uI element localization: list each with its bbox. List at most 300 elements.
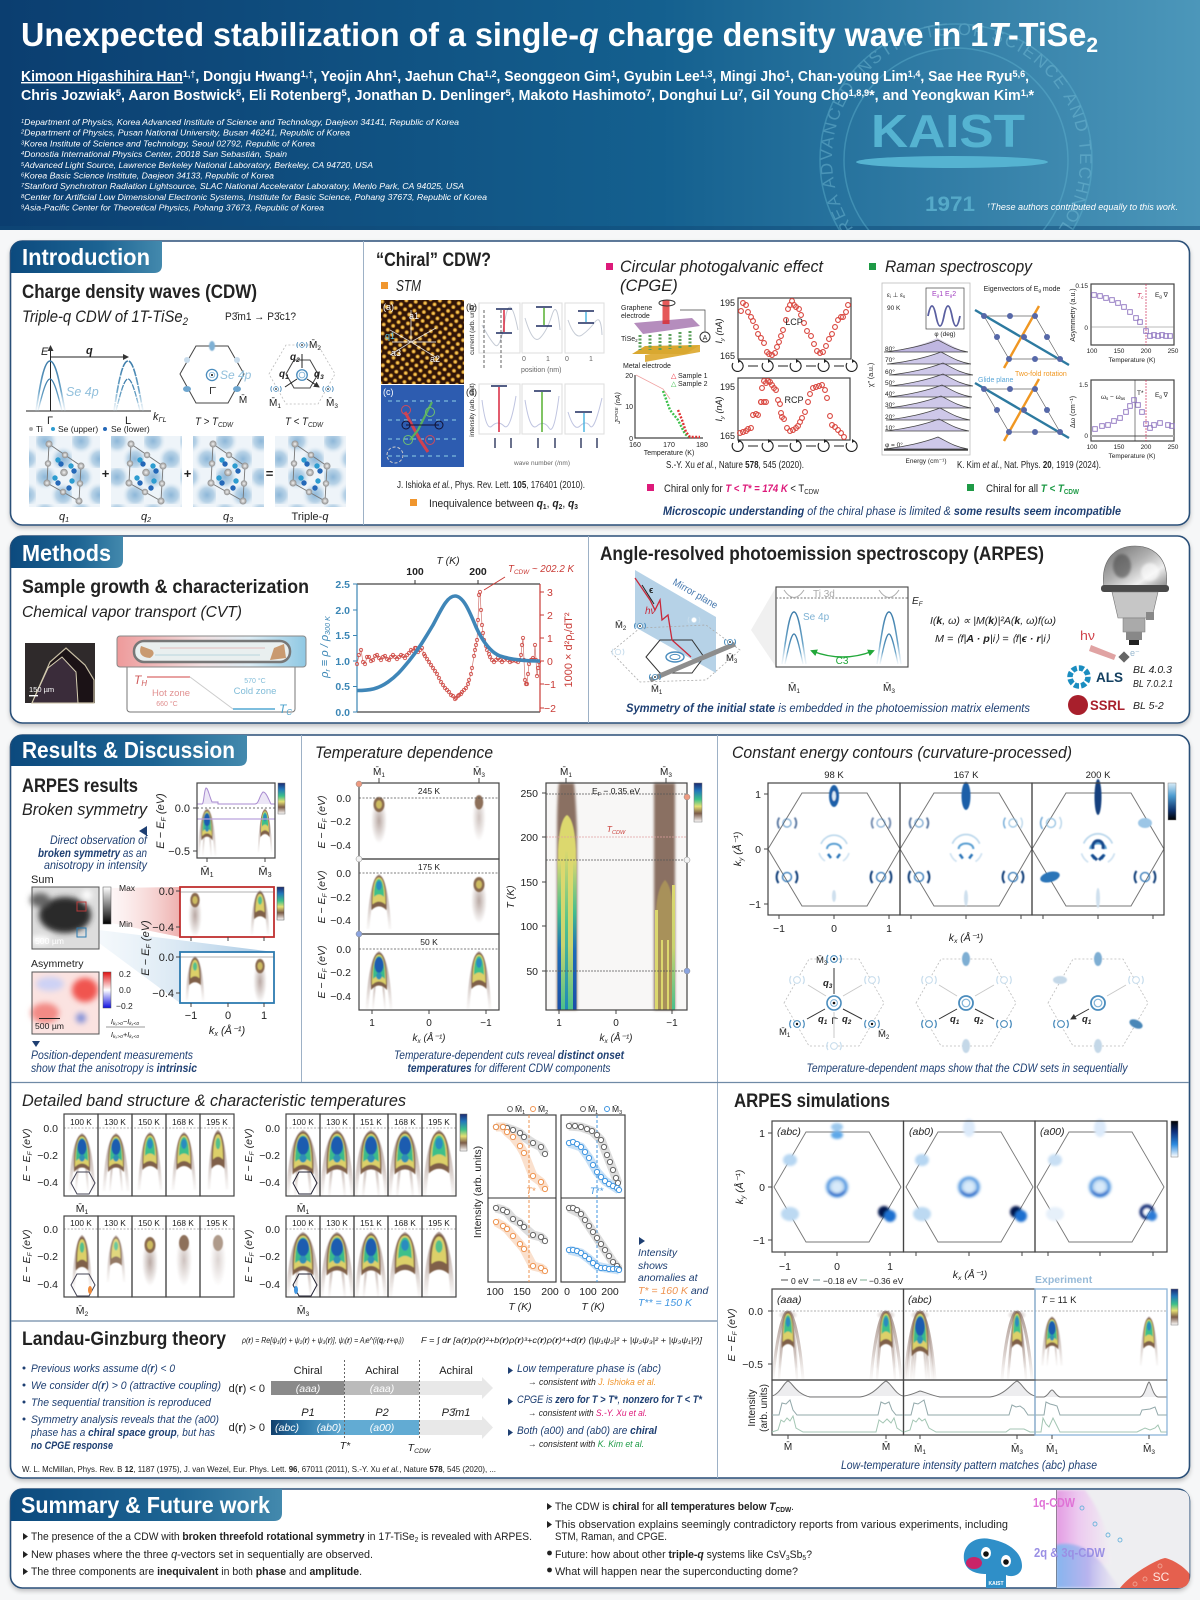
- CVT tube diagram: Hot zone: [152, 688, 190, 699]
- broken symmetry band plot: −0.5: [168, 846, 190, 858]
- phase diagram: SC: [1153, 1570, 1170, 1584]
- q-vector schematics: q2: [842, 1014, 852, 1026]
- temperature stack plot: EF − 0.35 eV: [592, 786, 640, 798]
- intrinsic note: [31, 1041, 198, 1075]
- simulated band plots and intensity curves: M̄3: [1143, 1442, 1155, 1456]
- phase diagram: [1056, 1490, 1190, 1588]
- intensity versus temperature plots: T (K): [508, 1301, 532, 1313]
- affiliations: 1Department of Physics, Korea Advanced Institute of Science and Technology, Daejeon 34141, Republic of Korea: [21, 117, 459, 127]
- position band plots: 1: [261, 1010, 267, 1022]
- band diagram: Γ: [47, 415, 53, 427]
- simulated constant energy maps: kx (Å⁻¹): [953, 1268, 987, 1282]
- heading: chiral CDW: “Chiral” CDW?: [376, 250, 491, 271]
- crystal photo: 150 µm: [29, 685, 54, 694]
- Raman eigenvector diagrams: Eigenvectors of Eg mode: [984, 286, 1061, 293]
- CVT tube diagram: 570 °C: [244, 677, 266, 685]
- simulated constant energy maps: (a00): [1040, 1126, 1065, 1138]
- real-space sum map: Max: [119, 883, 136, 893]
- constant energy maps: 98 K: [824, 770, 844, 781]
- STM images a and c: (a): [383, 302, 394, 312]
- CVT tube diagram: 660 °C: [156, 700, 178, 708]
- affiliations: 5Advanced Light Source, Lawrence Berkeley National Laboratory, Berkeley, CA 94720, USA: [21, 160, 373, 170]
- heading: constant energy contours: Constant energy contours (curvature-processed): [732, 744, 1072, 762]
- affiliations: 7Stanford Synchrotron Radiation Lightsource, SLAC National Accelerator Laboratory, Menlo Park, CA 94025, USA: [21, 181, 464, 191]
- temperature band cuts: −0.4: [330, 915, 351, 927]
- intensity versus temperature plots: 150: [513, 1286, 531, 1298]
- intensity versus temperature plots: 100: [579, 1286, 597, 1298]
- q-vector schematics: q2: [974, 1014, 984, 1026]
- resistivity chart: 2.5: [335, 579, 350, 591]
- broken symmetry band plot: [155, 783, 285, 879]
- BZ below TCDW: M̄3: [326, 396, 338, 410]
- detailed band plots: M1 and M2: 168 K: [172, 1218, 194, 1228]
- BZ below TCDW: q3: [314, 369, 324, 381]
- constant energy maps: 1: [886, 923, 892, 935]
- real-space sum map: Sum: [31, 874, 54, 886]
- STM images a and c: a3: [391, 348, 401, 358]
- Landau formulas: F = ∫ d r [a(r)ρ(r)²+b( r)ρ(r)³+c( r)ρ(r)⁴+d( r) (|ψ₁ψ₂|² + |ψ₂ψ₃|² + |ψ₃ψ₁|²)]: [421, 1336, 703, 1345]
- Raman spectra plot: φ = 0°: [885, 441, 903, 449]
- q-vector schematics: M̄1: [779, 1027, 791, 1039]
- temperature band cuts: 1: [369, 1018, 375, 1029]
- STM citation: J. Ishioka et al., Phys. Rev. Lett. 105, 176401 (2010).: [397, 480, 585, 491]
- Raman spectra plot: [868, 283, 973, 465]
- simulated band plots and intensity curves: M̄: [784, 1440, 792, 1453]
- simulated constant energy maps: ky (Å⁻¹): [733, 1170, 747, 1204]
- temperature stack plot: M̄3: [660, 765, 672, 779]
- detailed band plots: M1 and M2: 100 K: [70, 1117, 92, 1127]
- constant energy maps: 0: [755, 844, 761, 856]
- STM FFT profiles d: intensity (arb. unit): [469, 383, 476, 437]
- Landau phase bars: P2: [375, 1407, 389, 1419]
- Raman shift plot: Δω (cm⁻¹): [1070, 396, 1077, 428]
- ALS logo and beamlines: ALS: [1096, 669, 1123, 685]
- CPGE device schematic: electrode: [621, 313, 650, 320]
- Raman eigenvector diagrams: Two-fold rotation: [1015, 371, 1067, 378]
- Raman asymmetry plot: [1070, 283, 1179, 364]
- Raman spectra plot: 50°: [885, 379, 895, 387]
- CPGE temperature plot: 10: [625, 404, 633, 411]
- Raman spectra plot: 60°: [885, 368, 895, 376]
- ARPES band schematic: Ti 3d: [813, 589, 835, 600]
- CPGE temperature plot: △: [671, 381, 677, 388]
- STM images a and c: [381, 300, 464, 467]
- heading: ARPES simulations: ARPES simulations: [734, 1090, 890, 1112]
- simulated constant energy maps: −1: [753, 1235, 765, 1247]
- detailed band plots: M1 and M2: 150 K: [138, 1117, 160, 1127]
- band diagram: q: [86, 345, 93, 357]
- temperature band cuts: E − EF (eV): [316, 871, 329, 923]
- detailed band plots: M1 and M2: 168 K: [172, 1117, 194, 1127]
- temperature band cuts: 0.0: [336, 868, 351, 880]
- temperature stack plot: 0: [613, 1018, 619, 1029]
- simulated band plots and intensity curves: Intensity: [747, 1389, 758, 1427]
- temperature band cuts: −0.2: [330, 967, 351, 979]
- band diagram: kΓL: [153, 411, 167, 424]
- resistivity chart: 1.0: [335, 656, 350, 668]
- affiliations: 3Korea Institute of Science and Technology, Seoul 02792, Republic of Korea: [21, 138, 315, 148]
- detailed band plots: M1 and M2: 130 K: [104, 1218, 126, 1228]
- Raman citation: K. Kim et al., Nat. Phys. 20, 1919 (2024).: [957, 460, 1101, 471]
- Landau phase bars: TCDW: [408, 1442, 431, 1455]
- Raman shift plot: T*: [1137, 390, 1144, 397]
- simulated band plots and intensity curves: 0.0: [748, 1306, 763, 1318]
- CPGE device schematic: Metal electrode: [623, 363, 671, 370]
- CPGE device schematic: TiSe2: [621, 336, 638, 343]
- real-space sum map: [30, 874, 136, 949]
- CPGE LCP plot: 165: [720, 351, 735, 361]
- Landau phase bars: (a00): [370, 1422, 394, 1434]
- STM heading: STM: [396, 278, 421, 295]
- detailed band plots: M1 and M3 high statistics: E − EF (eV): [243, 1129, 256, 1181]
- STM line profiles b: 0: [565, 356, 569, 363]
- future work text: STM, Raman, and CPGE.: [555, 1531, 667, 1543]
- band diagram: Se 4p: [66, 385, 99, 399]
- Raman spectra plot: εi ⊥ εs: [887, 292, 905, 299]
- q-vector schematics: [779, 952, 1148, 1053]
- simulation legend and experiment label: [781, 1274, 1093, 1286]
- band diagram: L: [125, 415, 131, 427]
- CPGE temperature plot: Sample 1: [678, 373, 708, 380]
- heading: Summary and Future work: Summary & Future work: [21, 1492, 270, 1518]
- SSRL logo and beamline: BL 5-2: [1133, 700, 1164, 712]
- simulated band plots and intensity curves: M̄: [882, 1440, 890, 1453]
- position band plots: −0.4: [152, 988, 174, 1000]
- CPGE temperature plot: 160: [629, 442, 641, 449]
- simulated band plots and intensity curves: M̄3: [1011, 1442, 1023, 1456]
- space group text: P3̄m1 → P3̄c1?: [225, 311, 296, 323]
- detailed band plots: M1 and M3 high statistics: 151 K: [360, 1117, 382, 1127]
- simulated band plots and intensity curves: M̄1: [914, 1442, 926, 1456]
- summary findings: [23, 1531, 532, 1578]
- BZ below TCDW: M̄2: [309, 338, 321, 352]
- temperature band cuts: [316, 765, 499, 1045]
- Raman asymmetry plot: 100: [1087, 348, 1098, 355]
- subtitle: broken symmetry: Broken symmetry: [22, 801, 149, 819]
- Raman spectra plot: χ″ (a.u.): [868, 363, 875, 387]
- CPGE temperature plot: Sample 2: [678, 381, 708, 388]
- Landau phase bars: P1: [301, 1407, 315, 1419]
- Landau formulas: [241, 1336, 703, 1345]
- Landau phase bars: d(r) < 0: [229, 1383, 265, 1395]
- ARPES matrix element formulas: M = ⟨f|A · p|i⟩ = ⟨f|ϵ · r|i⟩: [935, 633, 1050, 645]
- Raman spectra plot: φ (deg): [934, 331, 956, 338]
- Landau phase bars: P3̄m1: [442, 1407, 470, 1419]
- simulated band plots and intensity curves: [726, 1289, 1178, 1456]
- Landau consequences: Low temperature phase is (abc): [517, 1363, 661, 1375]
- CDW real space maps: +: [102, 466, 110, 481]
- atom legend: Se (upper): [58, 424, 98, 434]
- simulated constant energy maps: −1: [779, 1261, 791, 1273]
- STM conclusion: Inequivalence between q1, q2, q3: [429, 498, 578, 511]
- detailed band plots: M1 and M2: 0.0: [43, 1123, 58, 1135]
- summary findings: New phases where the three q-vectors set in sequentially are observed.: [31, 1549, 373, 1561]
- detailed band plots: M1 and M2: −0.4: [37, 1279, 58, 1291]
- STM line profiles b: current (arb. unit): [469, 305, 476, 355]
- STM line profiles b: 1: [589, 356, 593, 363]
- temperature band cuts: −0.4: [330, 840, 351, 852]
- resistivity chart: 100: [406, 566, 424, 578]
- q-vector schematics: q1: [818, 1014, 828, 1026]
- detailed band plots: M1 and M3 high statistics: [243, 1114, 467, 1318]
- heading: detailed band structure: Detailed band structure & characteristic temperatures: [22, 1092, 406, 1110]
- CPGE heading: Circular photogalvanic effect: [620, 258, 824, 276]
- Raman eigenvector diagrams: Glide plane: [978, 377, 1014, 384]
- Raman spectra plot: 10°: [885, 424, 895, 432]
- temperature stack plot: TCDW: [607, 824, 626, 836]
- detailed band plots: M1 and M2: 0.0: [43, 1224, 58, 1236]
- simulated constant energy maps: [733, 1119, 1178, 1282]
- ARPES chamber illustration: e⁻: [1130, 648, 1140, 658]
- BZ above TCDW: [180, 341, 252, 429]
- simulated band plots and intensity curves: M̄1: [1046, 1442, 1058, 1456]
- CPGE citation: S.-Y. Xu et al., Nature 578, 545 (2020).: [666, 460, 804, 471]
- Raman shift plot: 250: [1168, 444, 1179, 451]
- CVT tube diagram: Cold zone: [234, 686, 276, 697]
- simulated band plots and intensity curves: E − EF (eV): [726, 1309, 739, 1361]
- CPGE temperature plot: 0: [629, 436, 633, 443]
- Raman spectra plot: 80°: [885, 345, 895, 353]
- Landau phase bars: (aaa): [370, 1383, 394, 1395]
- resistivity chart: 1.5: [335, 630, 350, 642]
- real-space asymmetry map: [31, 958, 145, 1040]
- ARPES band schematic: EF: [912, 596, 924, 608]
- affiliations: 9Asia-Pacific Center for Theoretical Physics, Pohang 37673, Republic of Korea: [21, 203, 324, 213]
- real-space asymmetry map: 500 µm: [35, 1021, 64, 1031]
- detailed band plots: M1 and M2: −0.4: [37, 1177, 58, 1189]
- temperature band cuts: 0.0: [336, 944, 351, 956]
- detailed band plots: M1 and M3 high statistics: M̄1: [297, 1202, 309, 1216]
- intrinsic note: Position-dependent measurements: [31, 1050, 193, 1062]
- detailed band plots: M1 and M2: M̄2: [76, 1304, 88, 1318]
- BZ above TCDW: T > TCDW: [195, 416, 234, 429]
- temperature stack plot: [505, 765, 702, 1045]
- temperature band cuts: M̄3: [473, 765, 485, 779]
- STM line profiles b: position (nm): [521, 367, 561, 374]
- panel: introduction: [10, 241, 1190, 525]
- intensity versus temperature plots: M̄1: [588, 1104, 598, 1116]
- Landau phase bars: d(r) > 0: [229, 1422, 265, 1434]
- resistivity chart: TCDW ~ 202.2 K: [508, 563, 575, 576]
- ARPES band schematic: [751, 587, 924, 695]
- q-vector schematics: M̄2: [878, 1029, 890, 1041]
- ARPES mirror plane geometry: M̄2: [615, 620, 627, 632]
- temperature band cuts: 0.0: [336, 793, 351, 805]
- Landau bullet list: Previous works assume d(r) < 0: [31, 1363, 176, 1375]
- title: Unexpected stabilization of a single-q charge density wave in 1T-TiSe2: [21, 16, 1098, 57]
- phase labels: [1033, 1495, 1106, 1560]
- CPGE heading: [606, 258, 824, 295]
- future work text: Future: how about other triple-q systems like CsV3Sb5?: [555, 1549, 812, 1562]
- panel: results and discussion: [10, 735, 1190, 1478]
- Raman shift plot: 100: [1087, 444, 1098, 451]
- detailed band plots: M1 and M2: −0.2: [37, 1251, 58, 1263]
- Raman asymmetry plot: Tc: [1137, 293, 1144, 300]
- heading: temperature dependence: Temperature dependence: [315, 744, 493, 762]
- detailed band plots: M1 and M3 high statistics: 195 K: [428, 1117, 450, 1127]
- real-space sum map: Min: [119, 919, 133, 929]
- STM line profiles b: 1: [546, 356, 550, 363]
- detailed band plots: M1 and M3 high statistics: 130 K: [326, 1218, 348, 1228]
- STM line profiles b: (b): [466, 302, 477, 312]
- CPGE temperature plot: 170: [663, 442, 675, 449]
- temperature stack plot: 150: [520, 877, 538, 889]
- broken symmetry note: anisotropy in intensity: [44, 860, 148, 872]
- Landau consequences: → consistent with K. Kim et al.: [528, 1439, 644, 1450]
- subheading: ARPES results: ARPES results: [22, 775, 138, 797]
- Raman asymmetry plot: 150: [1114, 348, 1125, 355]
- detailed band plots: M1 and M2: 130 K: [104, 1117, 126, 1127]
- future work text: [547, 1501, 1008, 1578]
- CPGE RCP plot: 195: [720, 382, 735, 392]
- detailed band plots: M1 and M3 high statistics: −0.2: [259, 1251, 280, 1263]
- detailed band plots: M1 and M3 high statistics: −0.4: [259, 1177, 280, 1189]
- temperature band cuts: 0: [426, 1018, 432, 1029]
- CPGE heading: (CPGE): [620, 277, 678, 295]
- ARPES mirror plane geometry: ϵ: [649, 585, 653, 595]
- temperature stack plot: M̄1: [560, 765, 572, 779]
- detailed band plots: M1 and M2: M̄1: [76, 1202, 88, 1216]
- ARPES matrix element formulas: I(k, ω) ∝ |M(k)|²A(k, ω)f(ω): [930, 615, 1056, 627]
- CPGE temperature plot: 180: [696, 442, 708, 449]
- STM images a and c: q1: [385, 331, 395, 341]
- ALS logo and beamlines: BL 7.0.2.1: [1133, 678, 1173, 690]
- Landau consequences: → consistent with S.-Y. Xu et al.: [528, 1408, 647, 1419]
- simulated band plots and intensity curves: −0.5: [742, 1359, 763, 1371]
- detailed band plots: M1 and M2: 195 K: [206, 1117, 228, 1127]
- simulation legend and experiment label: −0.36 eV: [869, 1276, 904, 1286]
- resistivity chart: 0: [547, 656, 553, 668]
- temperature band cuts: −1: [480, 1018, 492, 1029]
- CPGE RCP plot: RCP: [784, 395, 804, 405]
- mascot: [964, 1538, 1022, 1588]
- intensity versus temperature plots: T**: [590, 1186, 604, 1197]
- constant energy maps: 1: [755, 789, 761, 801]
- q-vector schematics: M̄3: [816, 955, 828, 967]
- temperature band cuts: M̄1: [373, 765, 385, 779]
- atom legend: Ti: [36, 424, 43, 434]
- temperature caption: [394, 1050, 625, 1075]
- CPGE RCP plot: 165: [720, 431, 735, 441]
- Raman shift plot: [1070, 380, 1179, 460]
- Raman shift plot: 0: [1084, 433, 1088, 440]
- intensity versus temperature plots: 200: [601, 1286, 619, 1298]
- panel: summary and future work: [10, 1489, 1190, 1588]
- q-vector schematics: q3: [823, 978, 833, 990]
- BZ above TCDW: Γ̄: [209, 386, 217, 397]
- atom legend: Se (lower): [111, 424, 150, 434]
- subheading: sample growth: Sample growth & characterization: [22, 576, 309, 598]
- Landau phase bars: Achiral: [365, 1365, 399, 1377]
- temperature stack plot: 1: [556, 1018, 562, 1029]
- Raman shift plot: Temperature (K): [1109, 453, 1155, 460]
- intensity versus temperature plots: M̄1: [515, 1104, 525, 1116]
- heading: Methods: Methods: [22, 540, 111, 566]
- authors: Kimoon Higashihira Han1,†, Dongju Hwang1,†, Yeojin Ahn1, Jaehun Cha1,2, Seonggeon Gim1, Gyubin Lee1,3, Mingi Jho1, Chan-young Lim1,4, Sae Hee Ryu5,6,: [21, 68, 1029, 85]
- resistivity chart: ρr ≡ ρ / ρ300 K: [319, 615, 332, 679]
- CPGE device schematic: A: [703, 335, 708, 342]
- CPGE LCP plot: Iy (nA): [714, 319, 726, 343]
- Landau references: W. L. McMillan, Phys. Rev. B 12, 1187 (1975), J. van Wezel, Eur. Phys. Lett. 96, 67011 (2011), S.-Y. Xu et al., Nature 578, 545 (2020), ...: [22, 1464, 496, 1474]
- panel: methods: [10, 536, 1190, 723]
- intensity versus temperature plots: [472, 1104, 625, 1313]
- intensity versus temperature plots: 100: [486, 1286, 504, 1298]
- subheading: charge density waves: Charge density waves (CDW): [22, 281, 257, 303]
- CDW real space maps: [29, 436, 346, 524]
- temperature band cuts: 245 K: [418, 786, 440, 796]
- subtitle: triple-q: Triple-q CDW of 1T-TiSe2: [22, 307, 188, 328]
- Landau phase bars: Chiral: [294, 1365, 322, 1377]
- STM line profiles b: [466, 302, 604, 374]
- Raman shift plot: 150: [1114, 444, 1125, 451]
- BZ below TCDW: T < TCDW: [285, 416, 324, 429]
- resistivity chart: 0.0: [335, 707, 350, 719]
- position band plots: kx (Å⁻¹): [209, 1024, 245, 1038]
- constant energy maps: −1: [749, 899, 761, 911]
- phase labels: 2q & 3q-CDW: [1034, 1545, 1106, 1560]
- CVT tube diagram: TH: [134, 673, 147, 688]
- temperature stack plot: 50: [526, 966, 538, 978]
- Landau phase bars: Achiral: [439, 1365, 473, 1377]
- CVT tube diagram: [117, 636, 306, 717]
- future work text: This observation explains seemingly contradictory reports from various experiments, including: [555, 1519, 1008, 1531]
- ARPES band schematic: C3: [836, 656, 849, 667]
- CDW real space maps: q3: [223, 511, 233, 524]
- ARPES chamber illustration: hν: [1080, 628, 1095, 643]
- constant energy maps: −1: [773, 923, 785, 935]
- crystal photo: [25, 643, 95, 703]
- Raman asymmetry plot: 250: [1168, 348, 1179, 355]
- STM FFT profiles d: wave number (/nm): [513, 460, 570, 467]
- resistivity chart: [319, 555, 576, 719]
- BZ above TCDW: Se 4p: [220, 368, 252, 382]
- ARPES mirror plane geometry: [611, 570, 740, 696]
- Landau bullet list: The sequential transition is reproduced: [31, 1397, 212, 1409]
- projection cones: [99, 887, 274, 1003]
- simulated band plots and intensity curves: (aaa): [777, 1294, 802, 1306]
- intensity versus temperature plots: M̄2: [538, 1104, 548, 1116]
- real-space asymmetry map: Asymmetry: [31, 958, 84, 970]
- temperature stack plot: T (K): [505, 885, 517, 909]
- KAIST seal: 1971: [925, 193, 975, 216]
- detailed band plots: M1 and M2: 100 K: [70, 1218, 92, 1228]
- resistivity chart: 200: [469, 566, 487, 578]
- equal contribution note: †These authors contributed equally to this work.: [987, 202, 1178, 212]
- q-vector schematics: Γ̄: [831, 1016, 839, 1027]
- temperature band cuts: E − EF (eV): [316, 796, 329, 848]
- position band plots: 0.0: [159, 952, 174, 964]
- CPGE temperature plot: JCPGE (nA): [614, 392, 622, 425]
- ARPES band schematic: Se 4p: [803, 612, 830, 623]
- position band plots: [140, 886, 284, 1038]
- real-space asymmetry map: 0.0: [119, 985, 131, 995]
- Landau bullet list: [22, 1363, 221, 1452]
- position band plots: 0: [225, 1010, 231, 1022]
- ARPES mirror plane geometry: M̄3: [726, 653, 738, 665]
- detailed band plots: M1 and M2: [21, 1114, 234, 1318]
- Raman eigenvector diagrams: [975, 286, 1069, 441]
- STM FFT profiles d: [466, 383, 604, 467]
- anomalies note: T* = 160 K and: [638, 1285, 710, 1297]
- q-vector schematics: q1: [1082, 1014, 1092, 1026]
- detailed band plots: M1 and M3 high statistics: 151 K: [360, 1218, 382, 1228]
- CDW real space maps: q2: [141, 511, 151, 524]
- ARPES mirror plane geometry: Mirror plane: [670, 577, 720, 612]
- broken symmetry band plot: E − EF (eV): [155, 793, 168, 849]
- Raman spectra plot: 90 K: [887, 305, 901, 312]
- subtitle: CVT: Chemical vapor transport (CVT): [22, 604, 242, 621]
- SSRL logo and beamline: [1068, 695, 1164, 715]
